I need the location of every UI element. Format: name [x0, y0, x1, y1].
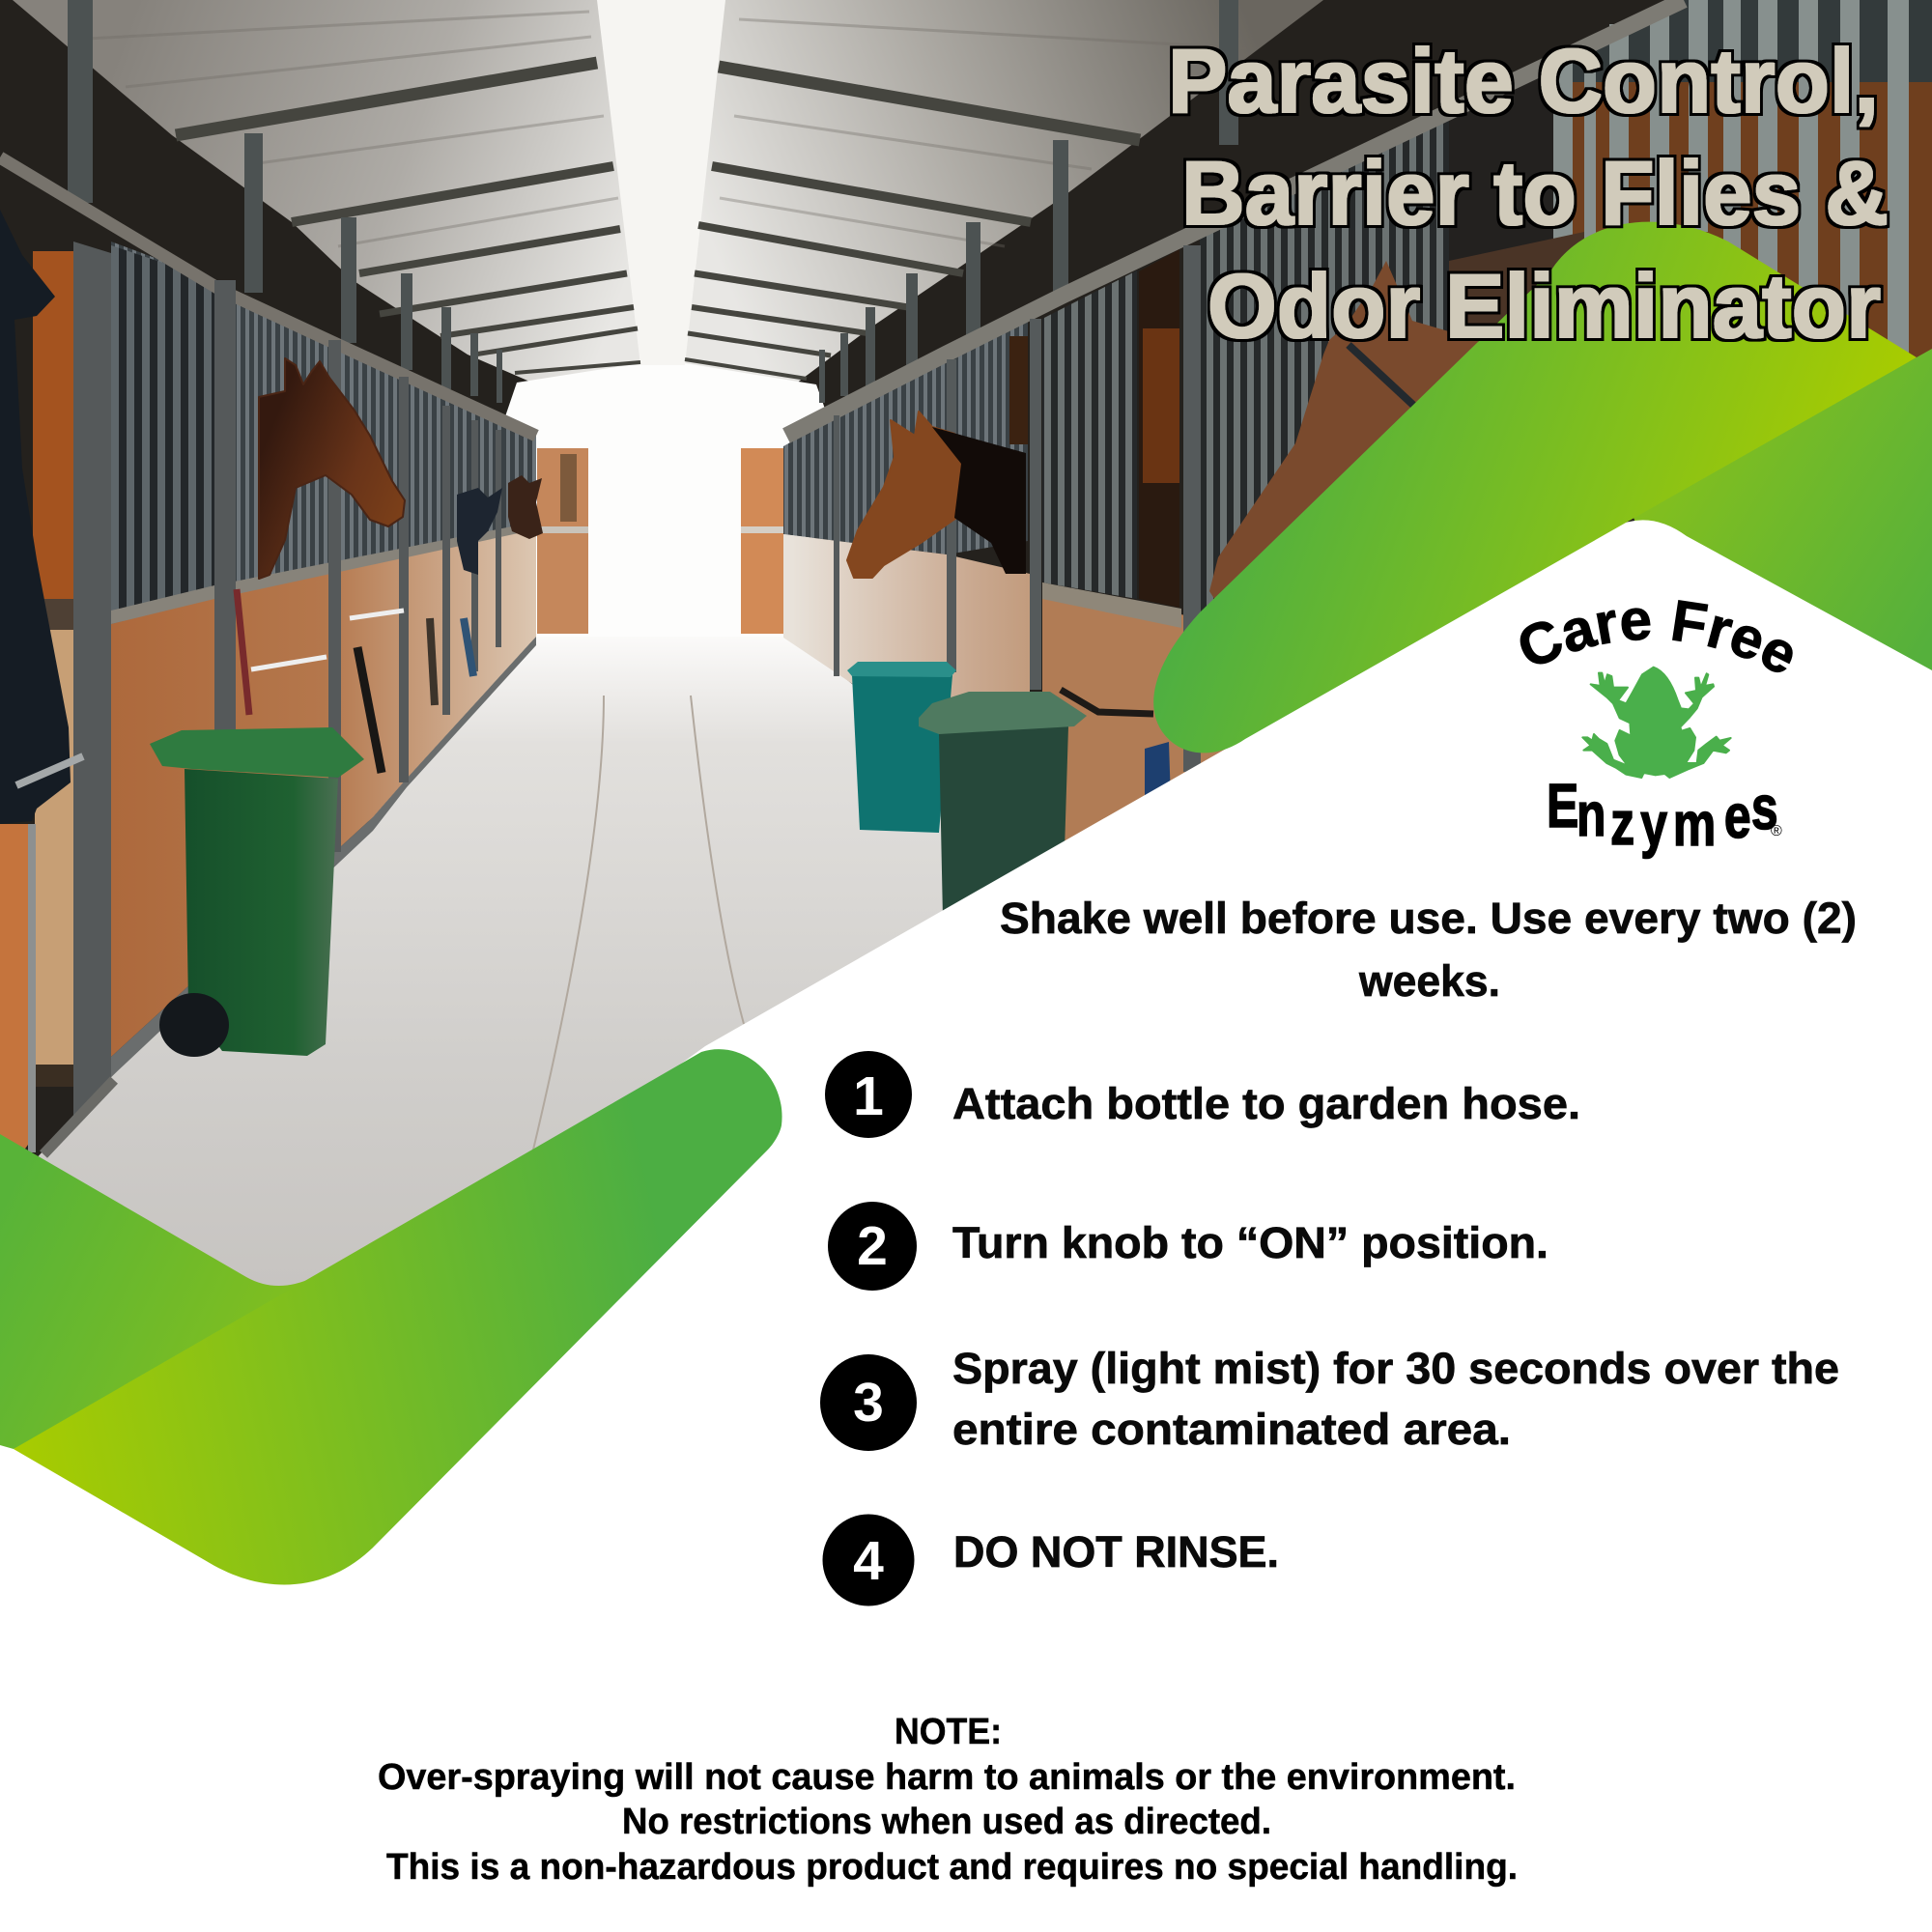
photo: post under left door: [28, 824, 36, 1152]
photo: big horse bridle: [1349, 345, 1417, 409]
photo: dark green bin: [919, 692, 1087, 918]
photo: right roof beams: [685, 67, 1140, 379]
photo: left near horse: [259, 358, 405, 579]
photo: right stall near bars: [1042, 270, 1137, 599]
step 4 badge: [823, 1515, 914, 1605]
step 1: [825, 1051, 1580, 1138]
photo: left wood edge: [0, 824, 28, 1183]
photo: upper right stall bars: [1200, 106, 1449, 753]
bin lid: [150, 727, 364, 778]
step 2 badge: 2: [857, 1215, 888, 1277]
photo: hanging blanket: [0, 210, 71, 824]
photo: left saddle racks and halters: [237, 589, 473, 773]
photo: dark roof backdrop: [0, 0, 1932, 1352]
step 2 badge: [828, 1202, 917, 1291]
note block: NOTE:: [895, 1712, 1002, 1752]
title: [1168, 30, 1889, 356]
upper lime chevron: [1153, 222, 1917, 753]
door upper band: [1555, 0, 1932, 82]
dark bin lid: [919, 692, 1087, 734]
door vertical bars: [1553, 0, 1909, 386]
bin body: [185, 769, 338, 1056]
photo: right door opening: [1139, 249, 1179, 608]
photo: ceiling grain: [87, 12, 1246, 246]
logo wordmark: Enzymes: Enzymes: [1547, 772, 1778, 859]
photo: right stall dark opening far: [1009, 336, 1028, 444]
note block: Over-spraying will not cause harm to animals or the environment.: [378, 1757, 1516, 1798]
photo: upper right wall: [1449, 232, 1584, 444]
photo: central skylight: [597, 0, 725, 365]
photo: upper right door: [1553, 0, 1932, 488]
step 3 badge: 3: [853, 1372, 884, 1434]
photo: left stall wood top band: [111, 522, 536, 624]
photo: right ceiling: [684, 0, 1323, 386]
photo: green bin left: [150, 727, 364, 1057]
title: Parasite Control,: [1168, 30, 1879, 131]
lower lime chevron: [14, 1049, 782, 1584]
photo: upper right opening: [1449, 58, 1555, 290]
bin wheel: [159, 993, 229, 1057]
photo: teal bin: [847, 662, 956, 833]
photo: right near horse neck: [932, 427, 1026, 574]
intro text: [1000, 894, 1857, 1006]
photo: right door opening orange glow: [1143, 328, 1179, 483]
door orange panel: [1555, 82, 1932, 488]
logo registered mark: ®: [1771, 823, 1782, 839]
photo: right posts: [834, 245, 1201, 772]
teal bin lid: [847, 662, 956, 677]
intro text: Shake well before use. Use every two (2): [1000, 894, 1857, 943]
photo: far left door lower panel: [35, 630, 73, 1065]
photo: left stall rail: [0, 157, 536, 436]
teal bin body: [852, 675, 952, 833]
title: Barrier to Flies &: [1181, 142, 1889, 243]
step 2: [828, 1202, 1548, 1291]
photo: far left frame strip: [28, 599, 73, 630]
intro text: weeks.: [1358, 956, 1500, 1006]
photo: far door right: [741, 448, 785, 634]
step 3: [820, 1344, 1839, 1454]
note block: This is a non-hazardous product and requires no special handling.: [386, 1847, 1518, 1888]
logo arc guide: [1519, 639, 1795, 683]
step 4: [823, 1515, 1279, 1605]
photo: right stall bars far: [783, 319, 1028, 554]
photo: right big horse: [1209, 261, 1488, 618]
logo: Care Free Enzymes: [1520, 600, 1793, 860]
logo icon: green frog: [1582, 668, 1731, 778]
step 3 text: Spray (light mist) for 30 seconds over the: [952, 1344, 1839, 1393]
step 2 text: Turn knob to “ON” position.: [952, 1218, 1548, 1267]
right green band: [1633, 349, 1932, 696]
photo: upper right rail: [786, 0, 1684, 436]
photo: left stall wall, upper bars: [111, 242, 536, 624]
photo: blue rug on the stall: [1145, 742, 1171, 810]
lower left green band: [0, 1134, 328, 1449]
photo: right stall lower wood: [1042, 582, 1256, 927]
step 4 text: DO NOT RINSE.: [953, 1527, 1279, 1577]
photo: left roof beams: [176, 63, 640, 373]
photo: near left stall bars: [111, 245, 214, 624]
step 1 badge: 1: [853, 1065, 884, 1127]
photo: left stall kick plate: [111, 637, 536, 1077]
title: Odor Eliminator: [1208, 255, 1881, 356]
step 3 badge: [820, 1354, 917, 1451]
photo: floor: [0, 637, 1063, 1352]
photo: bright far end of the aisle: [502, 363, 831, 657]
note block: [378, 1712, 1518, 1888]
dark bin body: [939, 726, 1068, 918]
step 3 text: [952, 1344, 1839, 1454]
photo: right near horse head: [847, 412, 966, 578]
step 1 badge: [825, 1051, 912, 1138]
photo: far left door upper orange panel: [33, 251, 73, 599]
photo: metal rack bar: [1061, 690, 1153, 714]
photo: left ceiling: [13, 0, 641, 386]
step 1 text: Attach bottle to garden hose.: [952, 1079, 1580, 1128]
photo: blanket rail: [16, 756, 83, 785]
note block: No restrictions when used as directed.: [622, 1802, 1271, 1842]
photo: floor skirting left: [36, 1065, 73, 1087]
photo: floor seams: [517, 696, 744, 1217]
photo: horse stable aisle: [0, 0, 1932, 1352]
photo: third left horse: [508, 475, 543, 539]
step 3 text: entire contaminated area.: [952, 1405, 1511, 1454]
photo: right stall wood band: [1042, 582, 1181, 628]
white content panel: [0, 520, 1932, 1932]
step 4 badge: 4: [853, 1530, 884, 1592]
photo: left posts: [73, 242, 501, 1121]
photo: diagonal skirting rail: [43, 1080, 114, 1154]
photo: left stall wood lower: [111, 529, 536, 1057]
photo: far door left: [537, 448, 588, 634]
logo wordmark: Care Free: Care Free: [1520, 600, 1793, 672]
photo: right stall wood far: [783, 534, 1030, 734]
photo: roof columns: [68, 0, 1238, 403]
photo: second left horse: [457, 488, 502, 575]
